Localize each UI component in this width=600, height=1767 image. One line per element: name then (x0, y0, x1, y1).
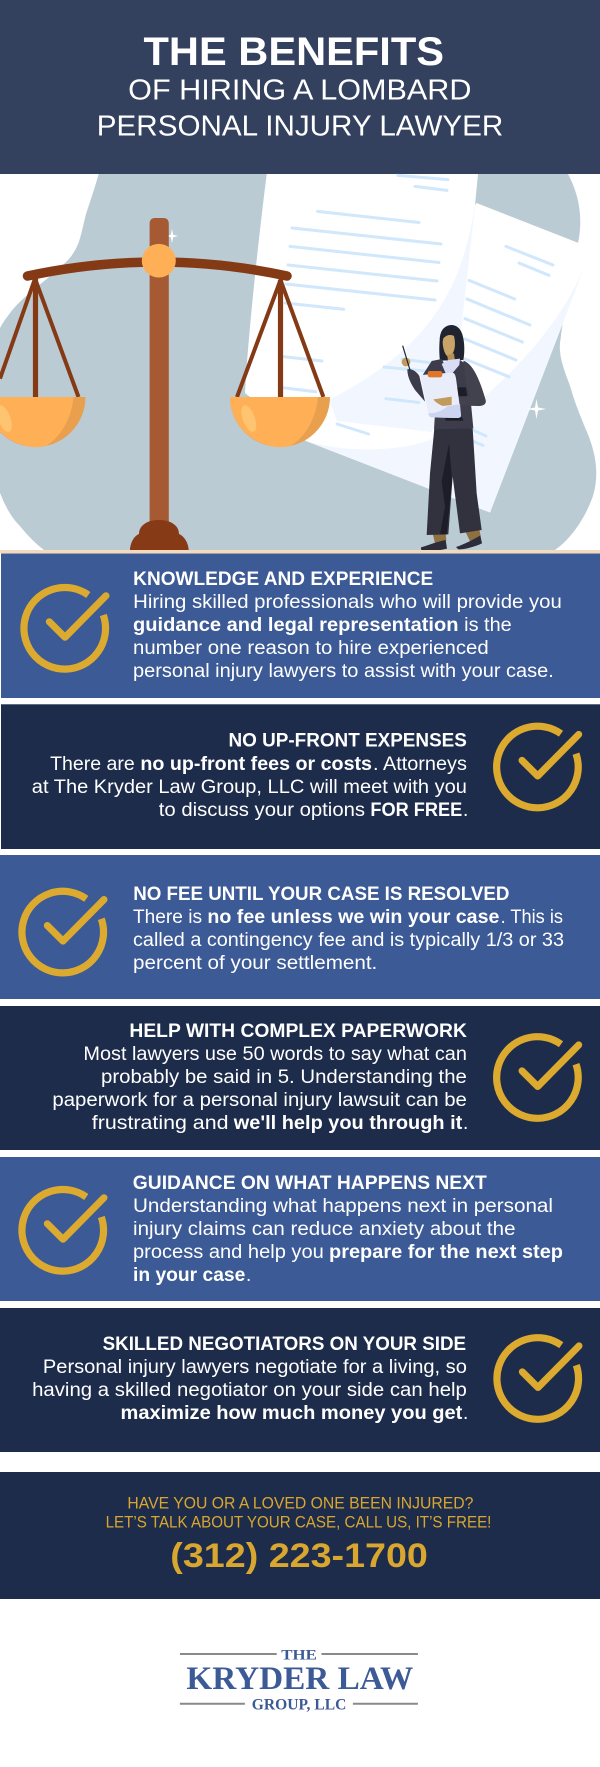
title: OF HIRING A LOMBARD (128, 74, 471, 106)
sparkle stars (166, 229, 546, 419)
panel: guidance on what happens next (0, 1157, 600, 1301)
body text: . (463, 800, 468, 821)
body text: prepare for the next step (329, 1242, 563, 1263)
body text: probably be said in 5. Understanding the (101, 1067, 467, 1088)
body text: percent of your settlement. (133, 953, 377, 974)
body text: Understanding what happens next in personal (133, 1196, 553, 1217)
heading: SKILLED NEGOTIATORS ON YOUR SIDE (103, 1334, 466, 1355)
title: PERSONAL INJURY LAWYER (97, 111, 503, 143)
heading: KNOWLEDGE AND EXPERIENCE (133, 569, 433, 590)
title: THE BENEFITS (144, 30, 444, 74)
body text: injury claims can reduce anxiety about the (133, 1219, 516, 1240)
icon: gold check circle (22, 891, 104, 973)
call to action text: LET’S TALK ABOUT YOUR CASE, CALL US, IT’S FREE! (106, 1513, 491, 1532)
body text: Hiring skilled professionals who will provide you (133, 592, 562, 613)
icon: gold check circle (497, 1338, 579, 1419)
body text: Personal injury lawyers negotiate for a living, so (43, 1357, 467, 1378)
body text (133, 592, 562, 682)
logo: The Kryder Law Group, LLC: KRYDER LAW (186, 1661, 413, 1697)
title (97, 30, 503, 143)
body text: Most lawyers use 50 words to say what can (83, 1044, 467, 1065)
body text: having a skilled negotiator on your side can help (32, 1380, 467, 1401)
lawyer figure (402, 325, 486, 551)
icon: gold check circle (497, 726, 579, 808)
body text: no up-front fees or costs (140, 754, 372, 775)
panel: knowledge and experience (1, 554, 600, 698)
panel: no up-front expenses (1, 704, 600, 849)
body text: called a contingency fee and is typically 1/3 or 33 (133, 930, 564, 951)
call to action banner (0, 1472, 600, 1599)
body text: . (463, 1113, 468, 1134)
panel: skilled negotiators on your side (0, 1308, 600, 1452)
body text: . Attorneys (373, 754, 467, 775)
body text: maximize how much money you get (120, 1403, 463, 1424)
phone number: (312) 223-1700 (170, 1537, 428, 1575)
body text: frustrating and (92, 1113, 228, 1134)
call to action text: HAVE YOU OR A LOVED ONE BEEN INJURED? (127, 1494, 473, 1513)
heading: NO UP-FRONT EXPENSES (228, 731, 467, 752)
call to action text (106, 1494, 491, 1532)
body text (133, 1196, 563, 1286)
body text: to discuss your options (159, 800, 365, 821)
heading: HELP WITH COMPLEX PAPERWORK (129, 1021, 467, 1042)
body text: . (246, 1265, 251, 1286)
logo: The Kryder Law Group, LLC: THE (281, 1648, 317, 1664)
body text: personal injury lawyers to assist with your case. (133, 661, 554, 682)
body text: There is (133, 907, 202, 928)
body text: paperwork for a personal injury lawsuit can be (52, 1090, 467, 1111)
back document (306, 203, 591, 512)
panel: help with complex paperwork (0, 1006, 600, 1150)
right pan (230, 397, 330, 447)
body text (32, 754, 468, 821)
body text: . This is (501, 907, 563, 928)
background blob (0, 174, 596, 550)
body text: we'll help you through it (233, 1113, 463, 1134)
body text: no fee unless we win your case (207, 907, 499, 928)
logo: The Kryder Law Group, LLC: GROUP, LLC (252, 1697, 346, 1714)
icon: gold check circle (497, 1037, 579, 1118)
body text: process and help you (133, 1242, 324, 1263)
body text: is the (464, 615, 512, 636)
body text: number one reason to hire experienced (133, 638, 489, 659)
icon: gold check circle (24, 588, 106, 669)
body text: at The Kryder Law Group, LLC will meet with you (32, 777, 467, 798)
body text: . (463, 1403, 468, 1424)
peach divider line (0, 550, 600, 553)
body text (52, 1044, 468, 1134)
panel: no fee until your case is resolved (0, 855, 600, 999)
illustration: scales of justice, documents and lawyer (0, 174, 596, 551)
front document (245, 174, 478, 441)
heading: NO FEE UNTIL YOUR CASE IS RESOLVED (133, 884, 509, 905)
body text: in your case (133, 1265, 245, 1286)
body text: There are (50, 754, 135, 775)
logo: The Kryder Law Group, LLC (180, 1648, 418, 1714)
heading: GUIDANCE ON WHAT HAPPENS NEXT (133, 1173, 487, 1194)
icon: gold check circle (22, 1190, 104, 1271)
scales of justice (0, 218, 330, 551)
body text: FOR FREE (370, 800, 462, 821)
body text (133, 907, 564, 974)
body text (32, 1357, 468, 1424)
left pan (0, 397, 86, 447)
header banner (0, 0, 600, 174)
body text: guidance and legal representation (133, 615, 458, 636)
